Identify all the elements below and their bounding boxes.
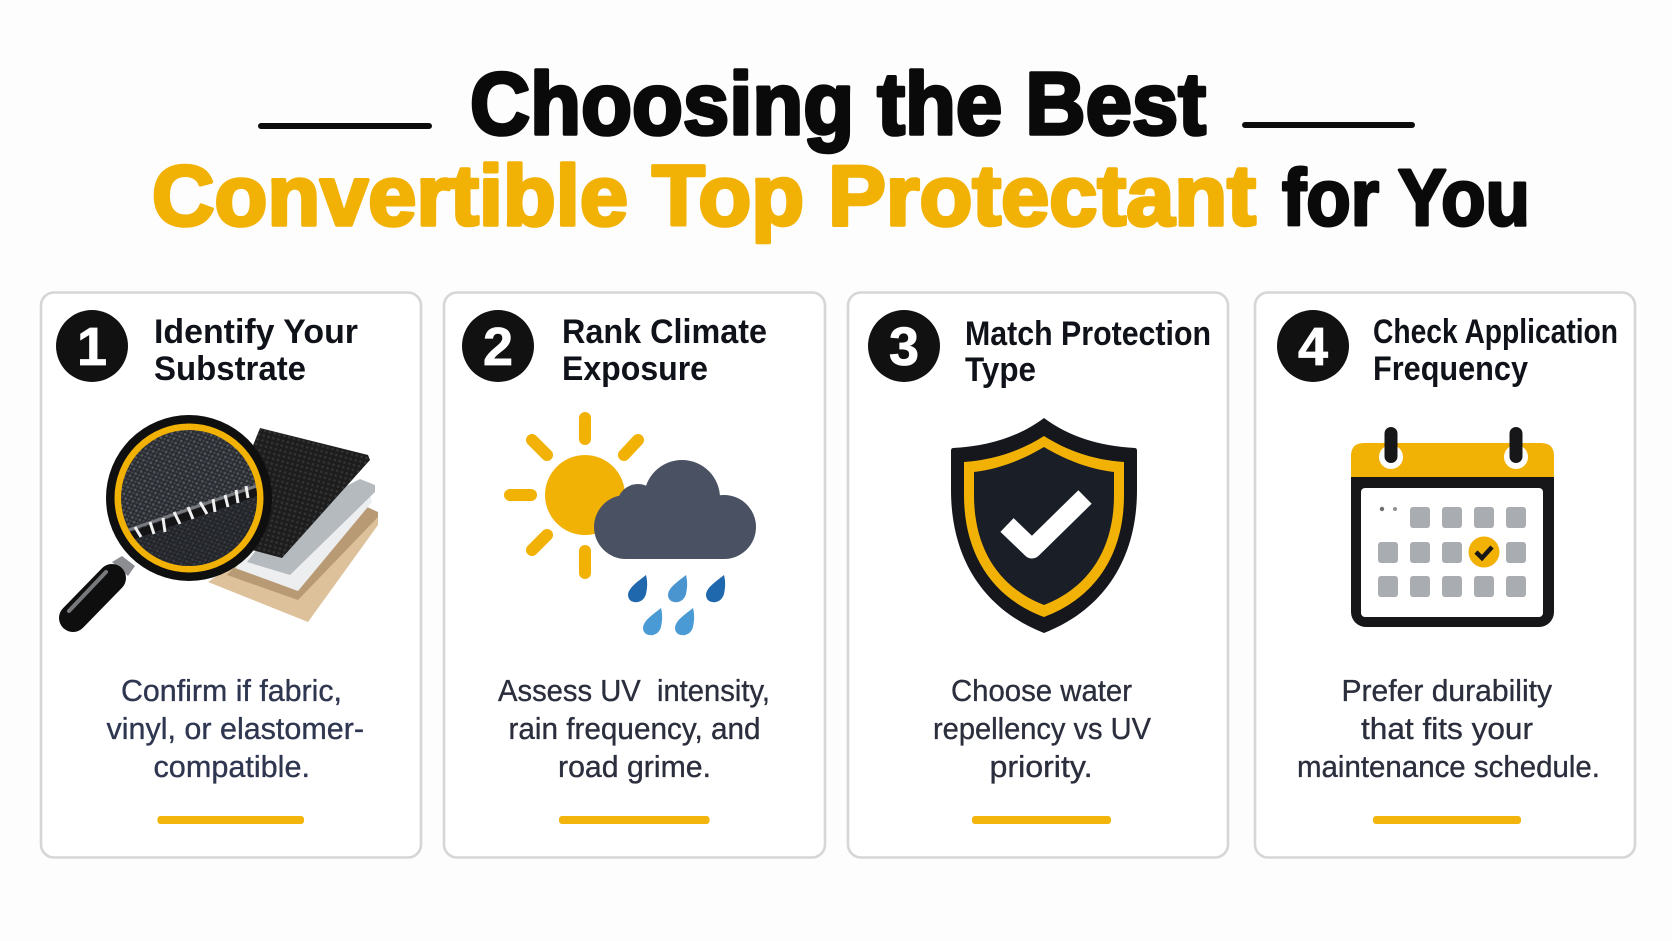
number badge 1: 1: [77, 317, 107, 377]
number badge 2: [462, 310, 534, 382]
title line 1: Choosing the Best: [470, 54, 1206, 153]
icon: shield with check: [951, 418, 1137, 633]
description: step 2: [498, 673, 770, 784]
heading: match protection type: Type: [965, 351, 1036, 389]
number badge 3: 3: [889, 317, 919, 377]
description: step 4: [1297, 673, 1600, 784]
description: step 3: repellency vs UV: [933, 711, 1151, 746]
panel: step 2 rank climate exposure: [444, 292, 825, 858]
icon: calendar with checked day: [1351, 427, 1554, 627]
heading: check application frequency: [1373, 313, 1618, 388]
accent bar: [559, 816, 710, 824]
heading: check application frequency: Frequency: [1373, 350, 1528, 388]
accent bar: [972, 816, 1111, 824]
accent bar: [158, 816, 304, 824]
heading: rank climate exposure: Rank Climate: [562, 313, 767, 351]
description: step 4: that fits your: [1361, 711, 1533, 746]
heading: rank climate exposure: Exposure: [562, 350, 708, 388]
accent bar: [1373, 816, 1521, 824]
number badge 2: 2: [483, 317, 513, 377]
heading: identify your substrate: Identify Your: [154, 313, 358, 351]
heading: check application frequency: Check Application: [1373, 313, 1618, 351]
description: step 3: Choose water: [951, 673, 1132, 708]
heading: match protection type: Match Protection: [965, 315, 1211, 353]
icon: sun, rain cloud and drops: [510, 418, 756, 635]
heading: identify your substrate: [154, 313, 358, 388]
number badge 4: 4: [1298, 317, 1328, 377]
description: step 2: Assess UV intensity,: [498, 673, 770, 708]
description: step 4: Prefer durability: [1342, 673, 1552, 708]
description: step 1: compatible.: [154, 749, 310, 784]
description: step 2: road grime.: [558, 749, 711, 784]
number badge 3: [868, 310, 940, 382]
title line 2 highlight: Convertible Top Protectant: [152, 149, 1256, 244]
description: step 1: Confirm if fabric,: [121, 673, 342, 708]
title line 2 end: for You: [1282, 153, 1530, 242]
panel: step 1 identify your substrate: [41, 292, 421, 858]
description: step 3: [933, 673, 1151, 784]
number badge 1: [56, 310, 128, 382]
panel: step 4 check application frequency: [1255, 292, 1635, 858]
icon: material layers under magnifying glass: [69, 415, 378, 622]
panel: step 3 match protection type: [848, 292, 1228, 858]
description: step 4: maintenance schedule.: [1297, 749, 1600, 784]
heading: identify your substrate: Substrate: [154, 350, 306, 388]
heading: rank climate exposure: [562, 313, 767, 388]
description: step 3: priority.: [990, 749, 1092, 784]
heading: match protection type: [965, 315, 1211, 389]
description: step 2: rain frequency, and: [508, 711, 760, 746]
title: [152, 54, 1530, 244]
number badge 4: [1277, 310, 1349, 382]
description: step 1: vinyl, or elastomer-: [106, 711, 364, 746]
description: step 1: [106, 673, 364, 784]
